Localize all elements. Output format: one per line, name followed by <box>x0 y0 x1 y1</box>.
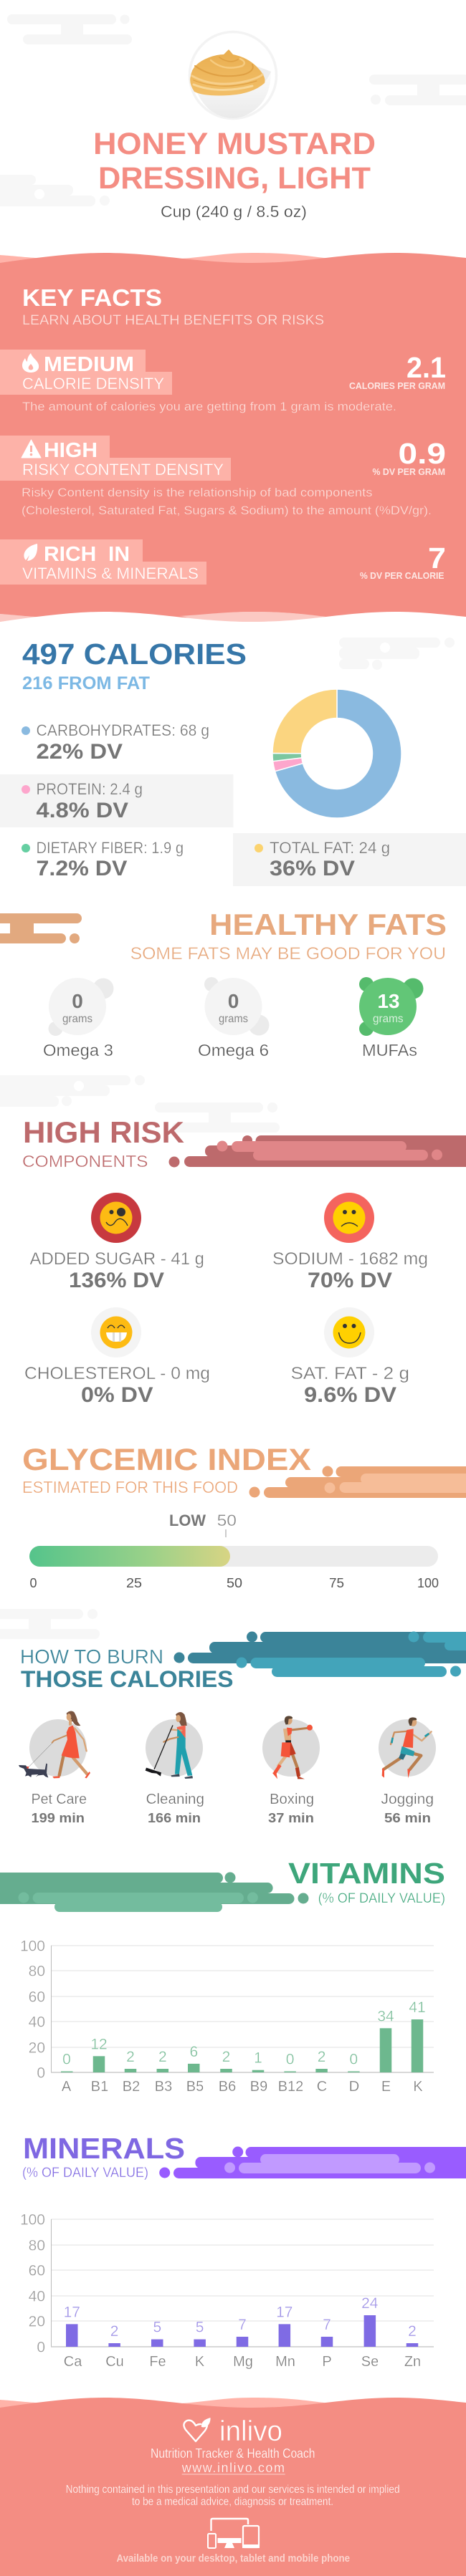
heading: vitamins <box>288 1857 445 1906</box>
bar chart: vitamins: 41 <box>409 1999 426 2016</box>
bar chart: vitamins: 0 <box>350 2052 358 2067</box>
bar chart: minerals: 17 <box>276 2304 293 2320</box>
fact: calorie density <box>0 350 446 413</box>
bar chart: vitamins: B1 <box>91 2079 108 2095</box>
bar chart: minerals: Se <box>361 2354 379 2370</box>
heading: high risk <box>22 1115 184 1171</box>
bar chart: vitamins: C <box>317 2079 327 2095</box>
activity: boxing: Boxing <box>270 1792 314 1807</box>
bar chart: minerals: P <box>322 2354 332 2370</box>
bar chart: minerals: 5 <box>153 2320 161 2336</box>
icon: jogger <box>382 1717 432 1778</box>
activity: jogging <box>379 1717 436 1825</box>
bar chart: minerals: 5 <box>196 2320 204 2336</box>
heading: vitamins: VITAMINS <box>288 1857 445 1890</box>
heading: how to burn those calories <box>20 1645 234 1692</box>
risk item: saturated fat: SAT. FAT - 2 g <box>291 1364 409 1383</box>
risk item: cholesterol: CHOLESTEROL - 0 mg <box>24 1364 210 1383</box>
bar chart: minerals: K <box>195 2354 205 2370</box>
legend: dietary fiber <box>22 839 184 880</box>
bar chart: minerals: 20 <box>29 2314 45 2330</box>
activity: jogging: Jogging <box>381 1792 434 1807</box>
bar chart: vitamins: A <box>62 2079 72 2095</box>
gauge: glycemic index: LOW <box>169 1512 206 1529</box>
bar chart: vitamins: 2 <box>126 2049 135 2065</box>
bar chart: minerals: 2 <box>110 2323 118 2340</box>
key facts heading <box>22 285 324 328</box>
gauge: glycemic index: 50 <box>217 1512 237 1529</box>
bar chart: vitamins: 2 <box>318 2049 325 2065</box>
heading: glycemic index: GLYCEMIC INDEX <box>22 1443 311 1477</box>
heading: high risk: HIGH RISK <box>23 1115 184 1149</box>
fact: calorie density: 2.1 <box>406 351 446 384</box>
decorative cloud: high risk <box>169 1135 466 1168</box>
icon: boxer <box>272 1716 313 1779</box>
decorative cloud: how to burn <box>173 1632 466 1677</box>
bar chart: minerals: Cu <box>105 2354 124 2370</box>
bar chart: vitamins: B5 <box>186 2079 204 2095</box>
bar chart: minerals: 40 <box>29 2288 45 2305</box>
stat: omega 3: grams <box>62 1013 92 1025</box>
stat: omega 3: 0 <box>72 990 83 1012</box>
panel: key facts <box>0 253 466 630</box>
stat: omega 6 <box>198 977 270 1059</box>
bar chart: vitamins: 2 <box>158 2049 167 2065</box>
bar chart: vitamins: 20 <box>29 2040 45 2056</box>
activity: cleaning <box>146 1712 204 1825</box>
fact: risky content density <box>0 436 446 517</box>
risk item: added sugar: ADDED SUGAR - 41 g <box>30 1249 204 1269</box>
gauge: glycemic index: 0 <box>30 1576 37 1590</box>
heading: minerals <box>22 2132 185 2181</box>
panel: footer <box>0 2398 466 2576</box>
activity: boxing: 37 min <box>268 1811 314 1825</box>
bar chart: vitamins: D <box>349 2079 359 2095</box>
bar chart: minerals: 60 <box>29 2262 45 2279</box>
activity: boxing <box>262 1716 320 1825</box>
bar chart: vitamins: 2 <box>222 2049 230 2065</box>
bar chart: vitamins: B6 <box>219 2079 236 2095</box>
bar chart: vitamins: 1 <box>254 2050 262 2067</box>
bar chart: minerals: 80 <box>29 2238 45 2254</box>
stat: mufas <box>359 977 423 1059</box>
heading: calories <box>22 638 247 693</box>
bar chart: vitamins: 0 <box>37 2065 45 2082</box>
bar chart: vitamins: 100 <box>20 1938 45 1954</box>
stat: omega 3: Omega 3 <box>43 1041 113 1059</box>
title <box>93 127 376 196</box>
fact: risky content density: Risky Content density is the relationship of bad components <box>22 486 373 499</box>
fact: risky content density: HIGH <box>44 439 98 462</box>
title: DRESSING, LIGHT <box>98 161 371 196</box>
heading: high risk: COMPONENTS <box>22 1152 148 1171</box>
fact: risky content density: (Cholesterol, Saturated Fat, Sugars & Sodium) to the amount (%DV/gr). <box>22 504 432 517</box>
icon: woman sweeping <box>146 1712 193 1779</box>
gauge: glycemic index: 100 <box>417 1576 439 1590</box>
icon: flame <box>22 353 39 373</box>
gauge: glycemic index: 25 <box>126 1576 142 1590</box>
bar chart: minerals: 7 <box>323 2317 331 2333</box>
fact: calorie density: CALORIES PER GRAM <box>349 380 445 391</box>
risk item: added sugar <box>30 1193 204 1292</box>
background cloud: how to burn <box>0 1609 100 1639</box>
fact: rich in vitamins and minerals: RICH IN <box>44 543 130 566</box>
decorative cloud: healthy fats <box>0 913 82 943</box>
decorative cloud: glycemic index <box>249 1466 466 1498</box>
background cloud: high risk centre <box>155 1102 280 1133</box>
legend: protein <box>0 774 234 827</box>
fact: rich in vitamins and minerals: 7 <box>428 542 446 575</box>
fact: calorie density: CALORIE DENSITY <box>22 375 164 393</box>
heading: vitamins: (% OF DAILY VALUE) <box>318 1890 445 1906</box>
bar chart: minerals <box>20 2212 434 2370</box>
activity: pet care <box>19 1711 90 1825</box>
risk item: cholesterol: 0% DV <box>81 1383 153 1407</box>
legend: dietary fiber: DIETARY FIBER: 1.9 g <box>36 839 184 857</box>
disclaimer: Nothing contained in this presentation and our services is intended or implied <box>66 2484 400 2496</box>
background cloud: high risk left <box>0 1075 145 1107</box>
stat: omega 6: 0 <box>228 990 239 1012</box>
background cloud: calories <box>339 638 455 670</box>
bar chart: vitamins: 0 <box>62 2052 71 2067</box>
risk item: sodium: 70% DV <box>308 1269 392 1292</box>
bar chart: vitamins: 12 <box>90 2036 108 2052</box>
bar chart: minerals: 17 <box>64 2304 80 2320</box>
decorative cloud: vitamins <box>0 1873 308 1912</box>
heading: minerals: (% OF DAILY VALUE) <box>22 2165 148 2181</box>
logo: inlivo: inlivo <box>219 2416 282 2447</box>
activity: cleaning: Cleaning <box>146 1792 204 1807</box>
stat: mufas: grams <box>373 1013 404 1025</box>
bar chart: vitamins: 34 <box>377 2008 394 2024</box>
serving size: Cup (240 g / 8.5 oz) <box>161 203 307 221</box>
legend: carbohydrates: CARBOHYDRATES: 68 g <box>36 721 209 739</box>
fact: calorie density: The amount of calories you are getting from 1 gram is moderate. <box>22 400 396 413</box>
activity: jogging: 56 min <box>384 1811 431 1825</box>
title: HONEY MUSTARD <box>93 127 376 161</box>
bar chart: minerals: Zn <box>404 2354 421 2370</box>
logo: inlivo <box>184 2416 282 2447</box>
risk item: cholesterol <box>24 1307 210 1407</box>
stat: omega 6: grams <box>219 1013 248 1025</box>
legend: total fat <box>233 833 466 886</box>
donut chart: macronutrients <box>272 689 401 818</box>
heading: glycemic index: ESTIMATED FOR THIS FOOD <box>22 1478 238 1496</box>
background cloud: top right <box>369 75 466 105</box>
heading: healthy fats: SOME FATS MAY BE GOOD FOR YOU <box>130 944 446 963</box>
fact: rich in vitamins and minerals: VITAMINS & MINERALS <box>22 564 199 582</box>
heading: minerals: MINERALS <box>23 2132 185 2165</box>
risk item: saturated fat <box>291 1307 409 1407</box>
icon: devices <box>208 2519 260 2548</box>
bar chart: vitamins <box>20 1938 434 2095</box>
legend: protein: 4.8% DV <box>36 799 128 822</box>
bar chart: minerals: 7 <box>238 2317 247 2333</box>
website link: www.inlivo.com <box>181 2461 285 2475</box>
icon: warning triangle <box>22 440 41 458</box>
heading: calories: 497 CALORIES <box>22 638 247 671</box>
bar chart: vitamins: B12 <box>278 2079 303 2095</box>
activity: cleaning: 166 min <box>148 1811 201 1825</box>
legend: total fat: TOTAL FAT: 24 g <box>270 839 390 857</box>
bar chart: minerals: Fe <box>149 2354 166 2370</box>
bar chart: vitamins: 60 <box>29 1989 45 2006</box>
stat: omega 3 <box>43 978 113 1059</box>
risk item: saturated fat: 9.6% DV <box>304 1383 396 1407</box>
activity: pet care: 199 min <box>32 1811 85 1825</box>
bar chart: vitamins: B9 <box>250 2079 267 2095</box>
heading: how to burn those calories: HOW TO BURN <box>20 1645 163 1668</box>
bar chart: vitamins: E <box>381 2079 391 2095</box>
bar chart: minerals: Mg <box>233 2354 253 2370</box>
gauge: glycemic index <box>29 1512 439 1590</box>
bar chart: vitamins: 40 <box>29 2014 45 2030</box>
bar chart: vitamins: B2 <box>123 2079 140 2095</box>
bar chart: vitamins: 80 <box>29 1963 45 1980</box>
bar chart: minerals: 0 <box>37 2340 45 2355</box>
heading: glycemic index <box>22 1443 311 1496</box>
gauge: glycemic index: 50 <box>227 1576 242 1590</box>
heading: how to burn those calories: THOSE CALORIES <box>21 1666 234 1692</box>
heading: calories: 216 FROM FAT <box>22 673 150 693</box>
availability note: Available on your desktop, tablet and mobile phone <box>116 2552 350 2565</box>
disclaimer: to be a medical advice, diagnosis or treatment. <box>132 2496 333 2508</box>
food image: bowl of mustard dressing <box>189 32 277 119</box>
risk item: sodium <box>272 1193 428 1292</box>
heading: healthy fats <box>130 908 447 963</box>
bar chart: vitamins: 6 <box>189 2044 198 2060</box>
legend: protein: PROTEIN: 2.4 g <box>36 780 143 798</box>
gauge: glycemic index: 75 <box>329 1576 344 1590</box>
bar chart: minerals: 24 <box>361 2295 379 2312</box>
fact: risky content density: % DV PER GRAM <box>373 466 445 477</box>
bar chart: minerals: 100 <box>20 2212 45 2228</box>
icon: woman walking a dog <box>19 1711 90 1778</box>
fact: rich in vitamins and minerals: % DV PER CALORIE <box>360 570 444 581</box>
decorative cloud: minerals <box>159 2146 466 2178</box>
fact: risky content density: 0.9 <box>399 437 446 470</box>
legend: total fat: 36% DV <box>270 857 355 880</box>
risk item: added sugar: 136% DV <box>69 1269 164 1292</box>
background cloud: middle left <box>0 175 110 206</box>
legend: dietary fiber: 7.2% DV <box>36 857 128 880</box>
tagline: Nutrition Tracker & Health Coach <box>151 2446 315 2461</box>
heading: healthy fats: HEALTHY FATS <box>209 908 447 941</box>
bar chart: vitamins: B3 <box>155 2079 172 2095</box>
fact: calorie density: MEDIUM <box>44 353 134 376</box>
fact: rich in vitamins and minerals <box>0 539 446 585</box>
risk item: sodium: SODIUM - 1682 mg <box>272 1249 428 1269</box>
stat: omega 6: Omega 6 <box>198 1041 269 1059</box>
disclaimer <box>66 2484 400 2508</box>
bar chart: vitamins: 0 <box>286 2052 294 2067</box>
icon: leaf <box>24 544 37 561</box>
legend: carbohydrates <box>22 721 209 764</box>
background cloud: top left <box>7 14 132 44</box>
activity: pet care: Pet Care <box>32 1792 87 1807</box>
key facts heading: LEARN ABOUT HEALTH BENEFITS OR RISKS <box>22 312 324 328</box>
fact: risky content density: RISKY CONTENT DENSITY <box>22 461 224 479</box>
legend: carbohydrates: 22% DV <box>36 740 123 764</box>
bar chart: vitamins: K <box>413 2079 423 2095</box>
bar chart: minerals: 2 <box>408 2323 417 2340</box>
bar chart: minerals: Ca <box>64 2354 82 2370</box>
key facts heading: KEY FACTS <box>22 285 162 312</box>
stat: mufas: 13 <box>377 990 400 1012</box>
stat: mufas: MUFAs <box>362 1041 417 1059</box>
bar chart: minerals: Mn <box>275 2354 295 2370</box>
